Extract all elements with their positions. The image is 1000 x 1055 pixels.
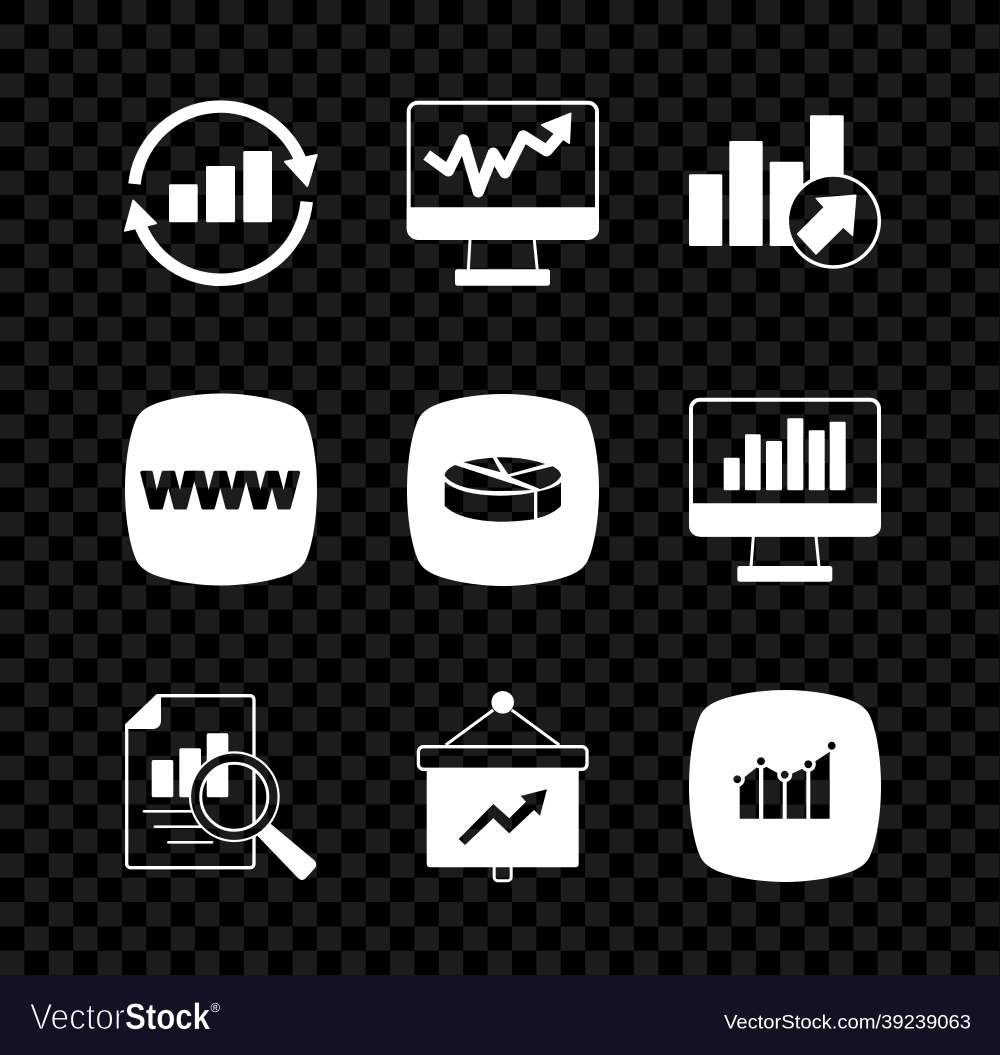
icon: bars with arrow badge bbox=[689, 115, 879, 267]
icon: presentation board with arrow bbox=[418, 691, 587, 881]
pie slices bbox=[445, 457, 561, 522]
rising arrow cutout bbox=[459, 789, 547, 845]
www text: www bbox=[141, 447, 299, 521]
footer logo bbox=[30, 996, 220, 1037]
diagonal arrow bbox=[797, 195, 856, 254]
footer logo: ® bbox=[210, 1000, 220, 1015]
badge circle bbox=[787, 175, 879, 267]
hanger pin bbox=[491, 691, 514, 714]
monitor stand bbox=[455, 240, 550, 286]
document bars bbox=[152, 733, 228, 797]
icon: pie chart badge bbox=[407, 394, 599, 586]
squircle bbox=[689, 690, 881, 882]
document fold bbox=[125, 694, 161, 729]
magnifier handle bbox=[257, 823, 316, 880]
icon: monitor with rising line bbox=[407, 103, 599, 286]
monitor screen frame bbox=[691, 400, 879, 535]
icon: circular arrows around bar chart bbox=[125, 107, 317, 280]
hanger strings bbox=[446, 710, 559, 745]
monitor chin bbox=[689, 503, 881, 537]
bars bbox=[689, 115, 844, 246]
document text lines bbox=[144, 811, 212, 842]
footer image id: VectorStock.com/39239063 bbox=[724, 1012, 971, 1034]
circular arrows bbox=[125, 107, 317, 280]
data points bbox=[733, 742, 836, 783]
footer logo: Vector bbox=[30, 996, 125, 1037]
bottom knob bbox=[494, 867, 511, 881]
area bbox=[740, 752, 830, 819]
monitor screen frame bbox=[409, 103, 597, 238]
icon: www badge bbox=[125, 394, 317, 586]
column dividers and dot halos bbox=[730, 754, 816, 820]
top roller bbox=[418, 747, 587, 769]
squircle bbox=[407, 394, 599, 586]
squircle bbox=[125, 394, 317, 586]
footer logo: Stock bbox=[125, 996, 211, 1037]
monitor chin bbox=[407, 207, 599, 240]
board bbox=[427, 768, 579, 867]
zigzag arrow line bbox=[427, 113, 571, 192]
document outline bbox=[127, 696, 254, 868]
icon: monitor with bar chart bbox=[689, 400, 881, 582]
icon: area chart badge bbox=[689, 690, 881, 882]
bars bbox=[169, 151, 272, 222]
footer bar bbox=[0, 975, 1000, 1055]
magnifier rings bbox=[190, 752, 279, 841]
bars bbox=[724, 418, 846, 490]
magnifier ring gap bbox=[195, 758, 273, 836]
icon: document with magnifier bbox=[125, 694, 316, 880]
monitor stand bbox=[737, 537, 832, 582]
